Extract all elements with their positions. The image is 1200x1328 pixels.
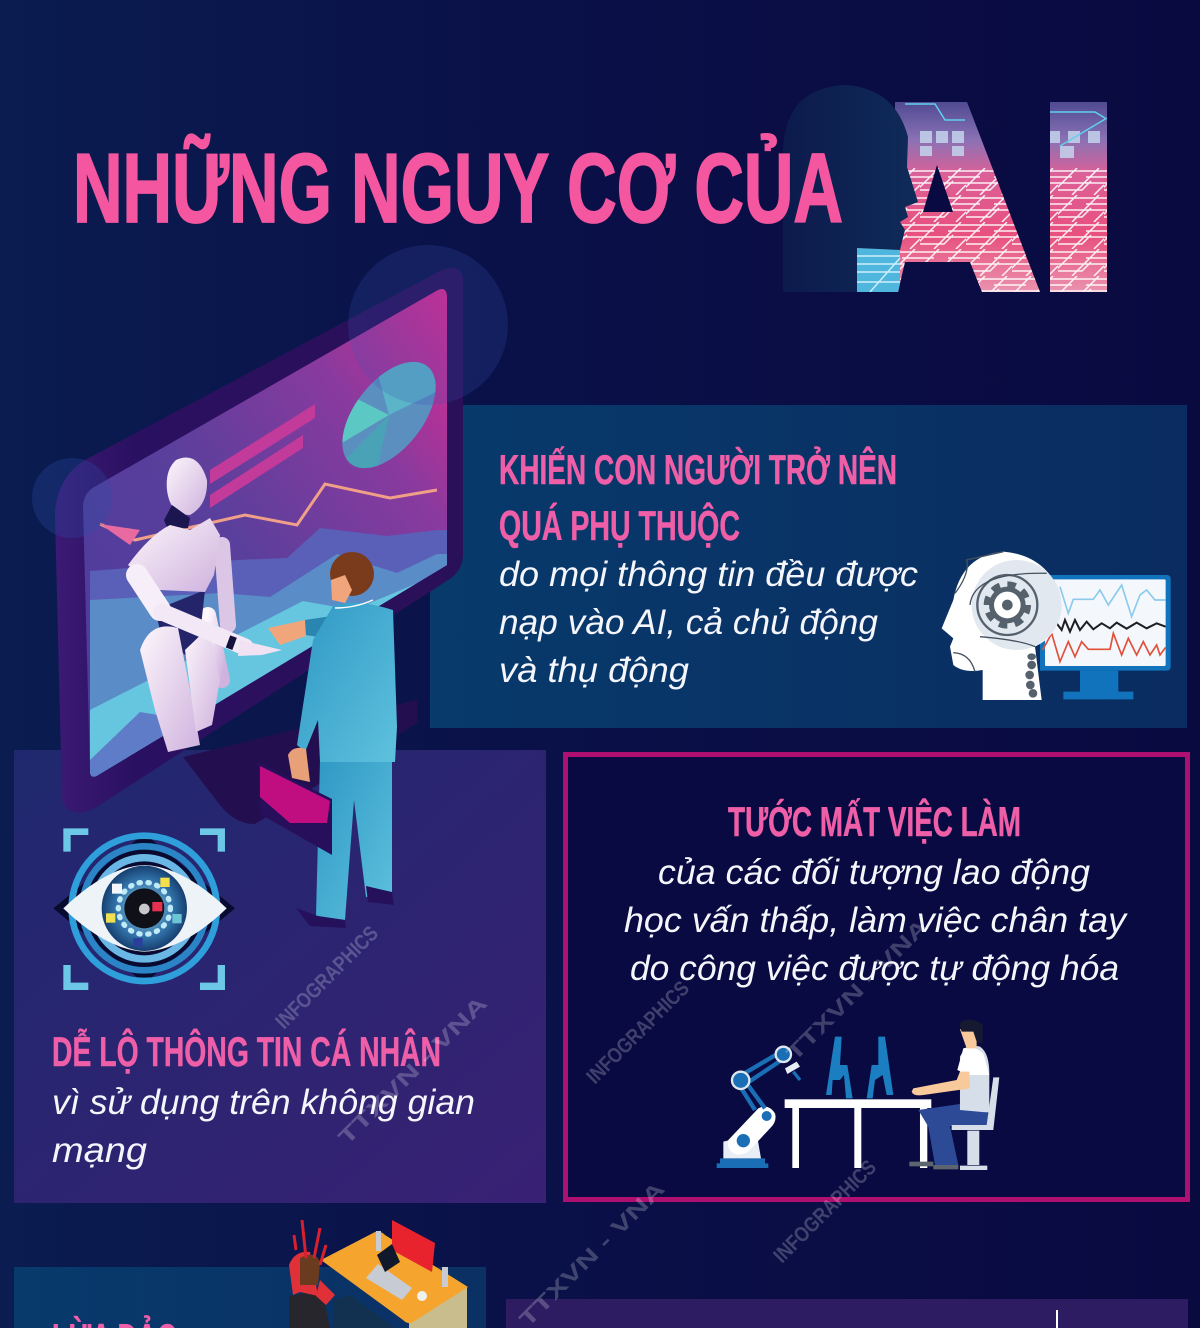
panel: việc làm frame bbox=[566, 754, 1188, 1200]
icon: head and brainwave monitor bbox=[942, 552, 1171, 700]
title: NHỮNG NGUY CƠ CỦA bbox=[73, 133, 843, 243]
panel: bottom right background bbox=[506, 1299, 1188, 1328]
text block: phụ thuộc: nạp vào AI, cả chủ động bbox=[499, 603, 879, 642]
icon: AI head silhouette with circuit letters bbox=[783, 85, 1110, 295]
monitor glow left bbox=[32, 458, 112, 538]
text block: việc làm: của các đối tượng lao động bbox=[658, 853, 1091, 892]
illustration: monitor with robot and businessman bbox=[32, 245, 508, 928]
panel: lừa đảo background bbox=[14, 1267, 486, 1328]
text block: phụ thuộc: do mọi thông tin đều được bbox=[499, 555, 919, 594]
heading: thông tin cá nhân: DỄ LỘ THÔNG TIN CÁ NHÂN bbox=[52, 1027, 441, 1075]
text block: phụ thuộc bbox=[499, 555, 919, 690]
heading: phụ thuộc: KHIẾN CON NGƯỜI TRỞ NÊN bbox=[499, 445, 897, 493]
heading: việc làm: TƯỚC MẤT VIỆC LÀM bbox=[728, 797, 1021, 845]
monitor screen bbox=[80, 285, 450, 800]
line chart bbox=[100, 484, 437, 540]
monitor glow right bbox=[348, 245, 508, 405]
robot bbox=[128, 458, 282, 752]
text block: việc làm: học vấn thấp, làm việc chân tay bbox=[624, 901, 1129, 940]
watermarks: INFOGRAPHICS bbox=[769, 1156, 881, 1268]
icon: robot arm and worker at desks bbox=[717, 1020, 999, 1170]
monitor frame bbox=[55, 268, 463, 812]
watermarks: TTXVN - VNA bbox=[782, 915, 933, 1066]
text block: thông tin cá nhân bbox=[52, 1083, 475, 1170]
heading: phụ thuộc line 2: QUÁ PHỤ THUỘC bbox=[499, 501, 740, 549]
monitor stand bbox=[183, 700, 417, 824]
panel: phụ thuộc background bbox=[430, 405, 1187, 728]
text block: thông tin cá nhân: mạng bbox=[52, 1131, 148, 1170]
panel: thông tin cá nhân background bbox=[14, 750, 546, 1203]
icon: scam victim at hacked computer bbox=[289, 1220, 468, 1328]
watermarks: INFOGRAPHICS bbox=[271, 922, 383, 1034]
pie chart bbox=[342, 362, 436, 468]
text block: thông tin cá nhân: vì sử dụng trên không gian bbox=[52, 1083, 475, 1122]
businessman bbox=[258, 552, 397, 928]
bars bbox=[210, 404, 315, 484]
text block: phụ thuộc: và thụ động bbox=[499, 651, 690, 690]
text block: việc làm: do công việc được tự động hóa bbox=[630, 949, 1119, 988]
watermarks bbox=[271, 915, 933, 1328]
briefcase bbox=[258, 762, 332, 855]
text block: việc làm bbox=[624, 853, 1129, 988]
icon: digital eye bbox=[53, 828, 235, 990]
watermarks: INFOGRAPHICS bbox=[582, 977, 694, 1089]
watermarks: TTXVN - VNA bbox=[334, 992, 492, 1150]
